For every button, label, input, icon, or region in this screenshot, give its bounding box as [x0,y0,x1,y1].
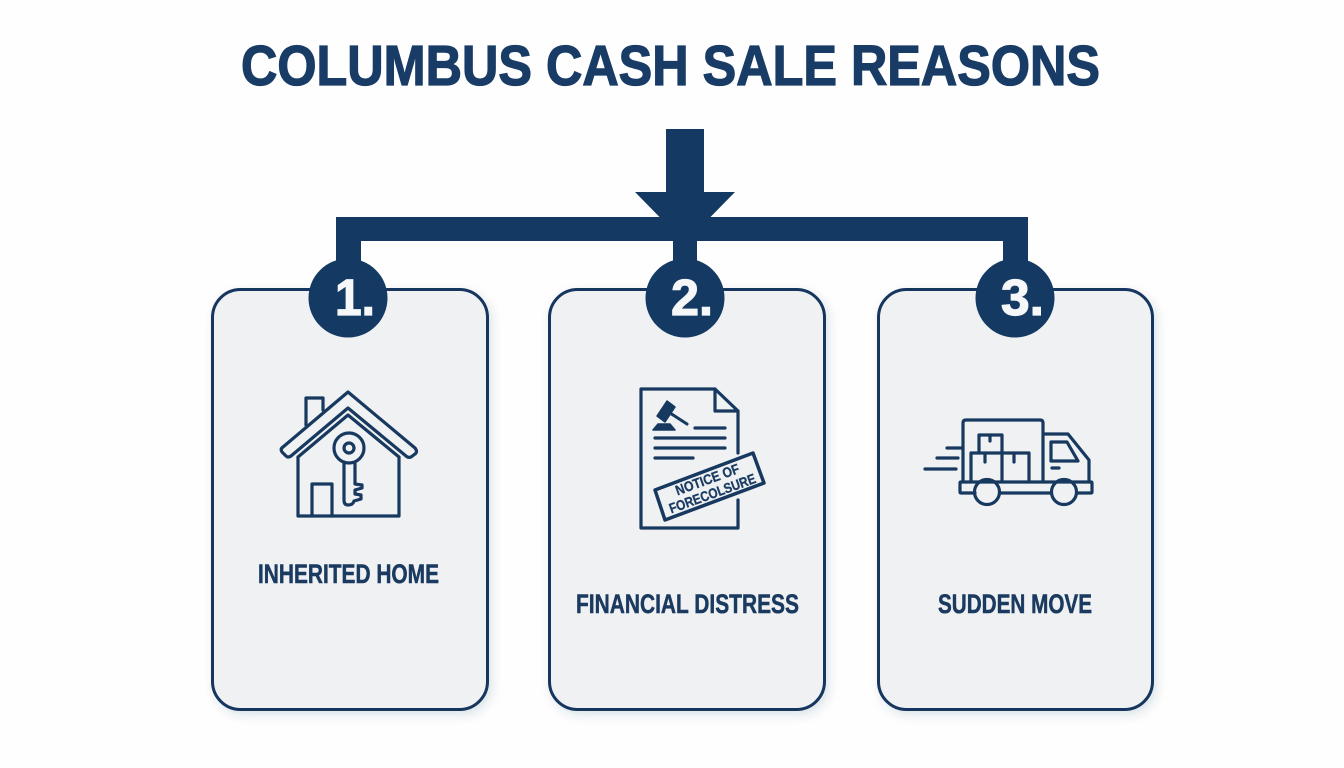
card 2 background [550,290,824,710]
number badge 3 [976,258,1054,338]
stamp: NOTICE OF [673,460,742,498]
number badge 1 [308,258,388,338]
stamp: FORECOLSURE [667,470,758,516]
number badge 3: 3. [1001,269,1044,326]
icon: moving truck [925,420,1092,504]
gavel [653,401,687,430]
label: financial distress: FINANCIAL DISTRESS [576,589,799,619]
number badge 2 [646,258,724,338]
panel: inherited home [212,290,488,710]
number badge 1: 1. [335,269,375,326]
number badge 2: 2. [671,269,713,326]
title: COLUMBUS CASH SALE REASONS [241,34,1100,98]
panel: sudden move [878,290,1152,710]
card 1 background [212,290,488,710]
connector: arrow and branching bar [336,129,1028,272]
icon: house with key [281,392,416,516]
card 3 background [878,290,1152,710]
stamp [655,453,764,520]
panel: financial distress [550,290,824,710]
label: inherited home: INHERITED HOME [258,559,439,589]
label: sudden move: SUDDEN MOVE [938,589,1092,619]
icon: foreclosure notice document [641,389,764,528]
